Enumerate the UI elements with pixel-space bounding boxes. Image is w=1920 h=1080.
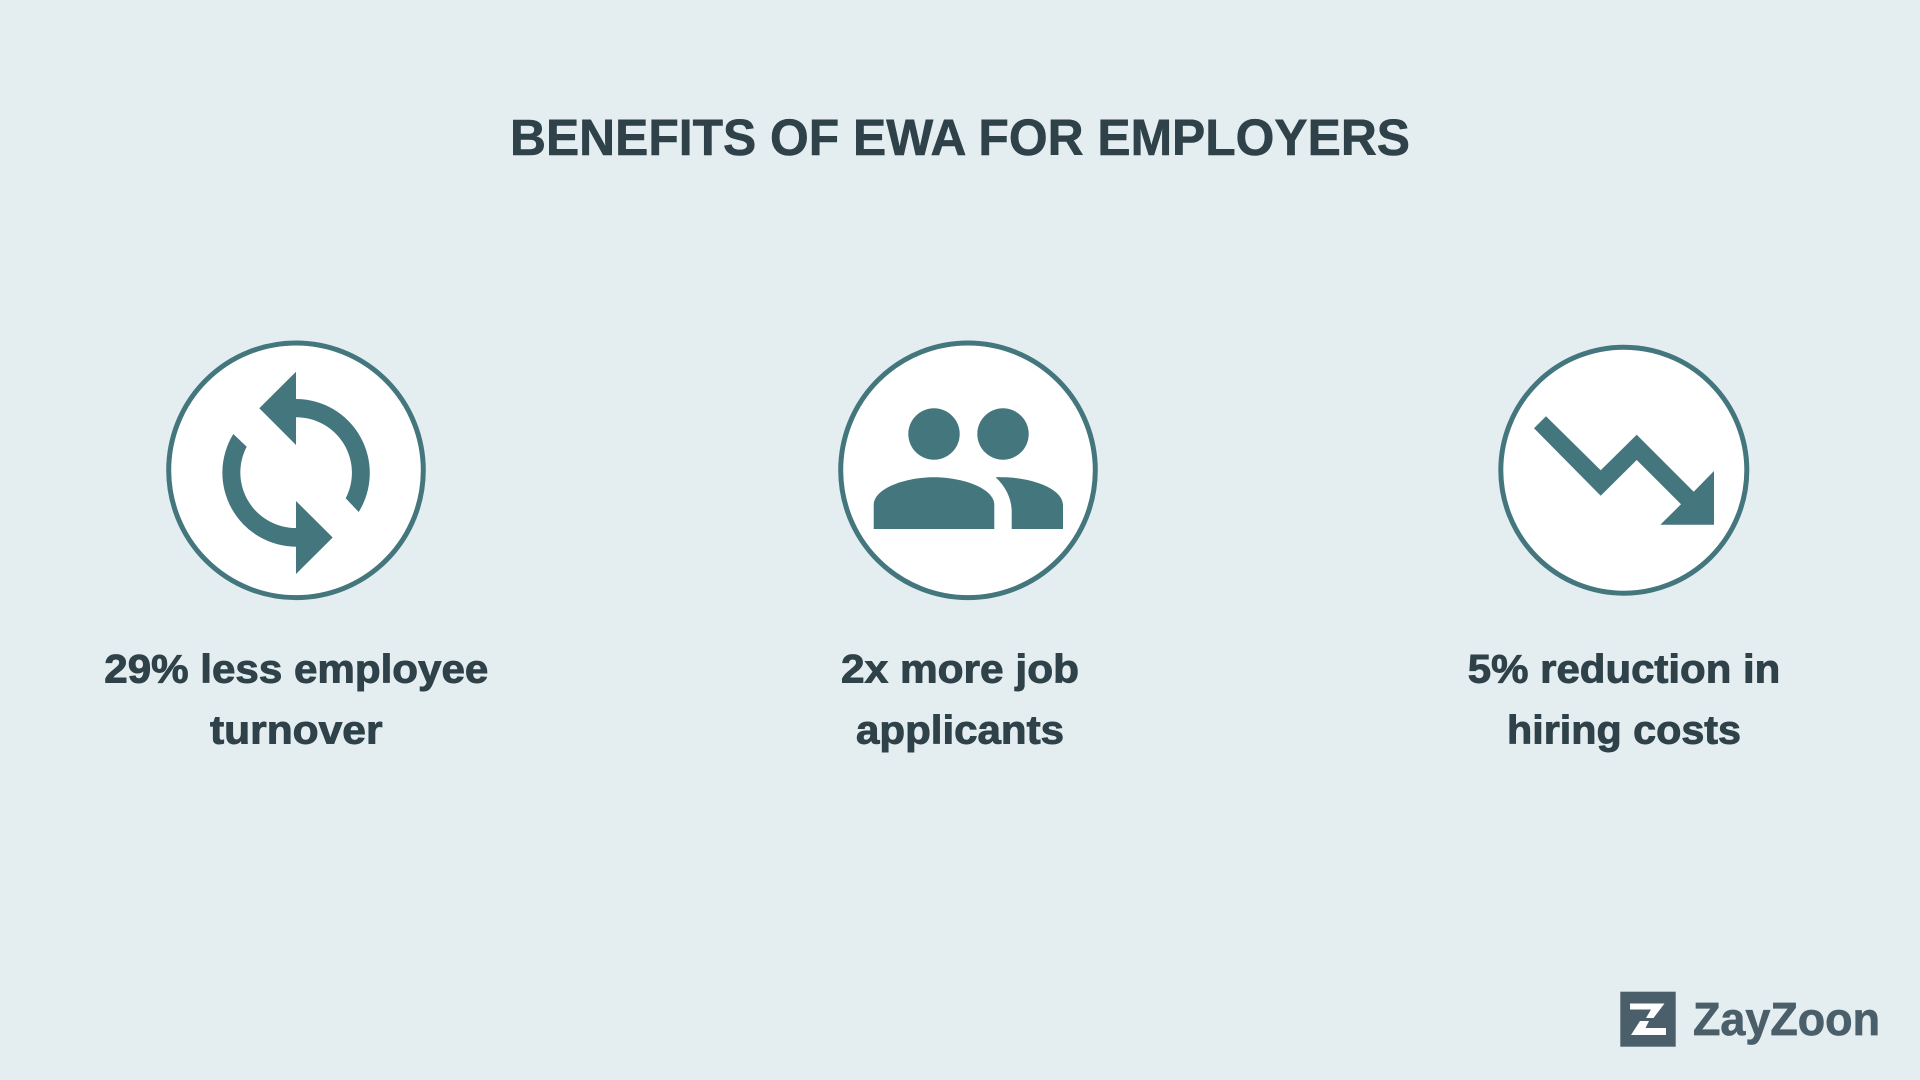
- label: 5% reduction in hiring costs: 5% reduction in: [1468, 648, 1780, 692]
- icon: trending down arrow: [1501, 347, 1747, 593]
- label: 29% less employee turnover: [104, 648, 488, 752]
- label: 2x more job applicants: [841, 648, 1079, 752]
- label: 29% less employee turnover: 29% less employee: [104, 648, 488, 692]
- panel: employee turnover: [104, 343, 488, 752]
- panel: hiring costs: [1468, 347, 1780, 752]
- label: 29% less employee turnover: turnover: [210, 708, 382, 752]
- label: 2x more job applicants: 2x more job: [841, 648, 1079, 692]
- panel: job applicants: [841, 343, 1095, 752]
- logo: ZayZoon: [1620, 992, 1880, 1047]
- icon: Z mark: [1620, 992, 1676, 1047]
- wordmark: ZayZoon: [1693, 993, 1880, 1045]
- label: 2x more job applicants: applicants: [856, 708, 1064, 752]
- icon: two people: [841, 343, 1095, 598]
- title: BENEFITS OF EWA FOR EMPLOYERS: [510, 109, 1410, 166]
- icon: circular arrows: [169, 343, 423, 598]
- label: 5% reduction in hiring costs: hiring costs: [1507, 708, 1741, 752]
- label: 5% reduction in hiring costs: [1468, 648, 1780, 752]
